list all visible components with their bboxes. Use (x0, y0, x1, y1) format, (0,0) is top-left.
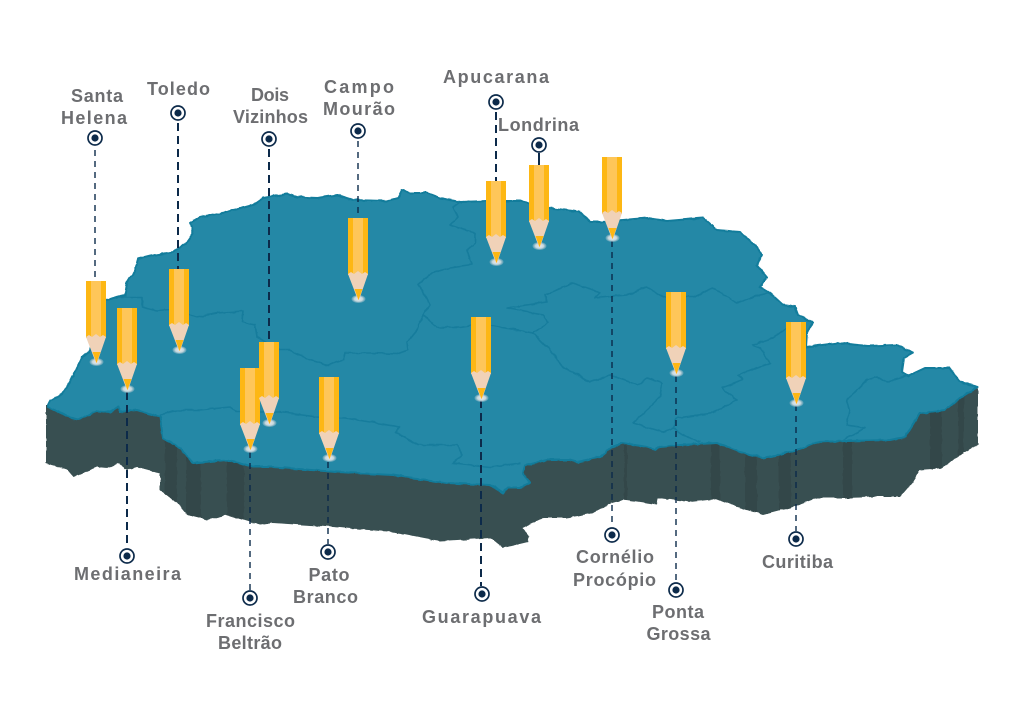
pencil: Ponta Grossa (666, 292, 686, 377)
label: Pato Branco (293, 565, 358, 607)
pencil: Dois Vizinhos (259, 342, 279, 427)
map side wall (40, 380, 985, 555)
label: Medianeira: Medianeira (74, 564, 182, 584)
label: Francisco Beltrão: Francisco (206, 611, 295, 631)
pencil: Pato Branco (319, 377, 339, 462)
marker: Curitiba (789, 532, 803, 546)
label: Guarapuava: Guarapuava (422, 607, 542, 627)
map: Paraná 3D relief (40, 190, 985, 555)
marker: Ponta Grossa (669, 583, 683, 597)
label: Ponta Grossa: Grossa (646, 624, 711, 644)
pencil: Guarapuava (471, 317, 491, 402)
marker: Apucarana (489, 95, 503, 109)
pencil: Apucarana (486, 181, 506, 266)
pencil: Santa Helena (86, 281, 106, 366)
label: Londrina: Londrina (498, 115, 580, 135)
label: Dois Vizinhos: Vizinhos (233, 107, 308, 127)
pencil: Londrina (529, 165, 549, 250)
label: Ponta Grossa (646, 602, 711, 644)
marker: Francisco Beltrão (243, 591, 257, 605)
label: Curitiba: Curitiba (762, 552, 834, 572)
pencil: Francisco Beltrão (240, 368, 260, 453)
label: Francisco Beltrão (206, 611, 295, 653)
label: Cornélio Procópio: Procópio (573, 570, 656, 590)
label: Dois Vizinhos (233, 85, 308, 127)
label: Ponta Grossa: Ponta (652, 602, 705, 622)
label: Toledo: Toledo (147, 79, 210, 99)
label: Santa Helena (61, 86, 128, 128)
label: Dois Vizinhos: Dois (251, 85, 289, 105)
map region borders (120, 202, 908, 467)
marker: Toledo (171, 106, 185, 120)
marker: Guarapuava (475, 587, 489, 601)
label: Apucarana: Apucarana (443, 67, 550, 87)
label: Cornélio Procópio (573, 547, 656, 590)
label: Santa Helena: Helena (61, 108, 128, 128)
marker: Campo Mourão (351, 124, 365, 138)
marker: Londrina (532, 138, 546, 152)
map top surface (48, 190, 978, 493)
pencil: Toledo (169, 269, 189, 354)
marker: Cornélio Procópio (605, 528, 619, 542)
label: Campo Mourão: Mourão (323, 99, 395, 119)
pencil: Cornélio Procópio (602, 157, 622, 242)
pencil: Campo Mourão (348, 218, 368, 303)
dashed leader lines (95, 112, 796, 590)
label: Cornélio Procópio: Cornélio (576, 547, 654, 567)
label: Santa Helena: Santa (71, 86, 124, 106)
pencil: Medianeira (117, 308, 137, 393)
marker: Santa Helena (88, 131, 102, 145)
label: Pato Branco: Pato (308, 565, 350, 585)
label: Campo Mourão (323, 77, 395, 119)
label: Campo Mourão: Campo (324, 77, 394, 97)
label: Pato Branco: Branco (293, 587, 358, 607)
marker: Medianeira (120, 549, 134, 563)
marker: Pato Branco (321, 545, 335, 559)
label: Francisco Beltrão: Beltrão (218, 633, 282, 653)
pencil: Curitiba (786, 322, 806, 407)
marker: Dois Vizinhos (262, 132, 276, 146)
